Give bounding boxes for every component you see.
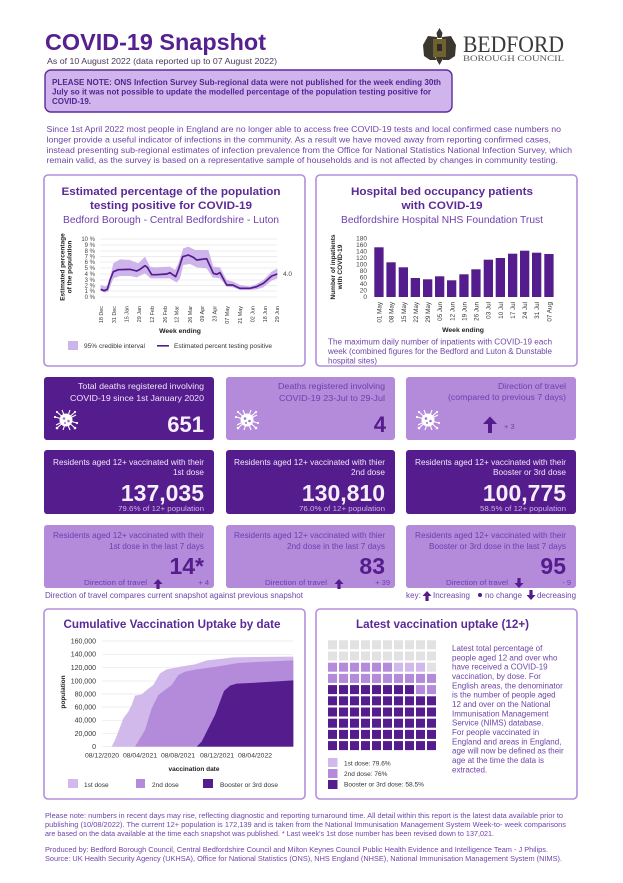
intro text	[46, 124, 572, 165]
tile: first dose total	[44, 450, 214, 514]
heading	[62, 186, 281, 212]
y axis labels: 160	[356, 242, 367, 249]
y axis labels: 1 %	[85, 289, 96, 295]
tile: direction of travel: Direction of travel	[498, 381, 566, 391]
x axis labels: 26 Feb	[163, 306, 169, 323]
y axis labels: 140,000	[71, 652, 96, 659]
y axis labels	[71, 638, 96, 751]
panel: hospital occupancy	[316, 175, 577, 366]
explanatory text: have received a COVID-19	[452, 663, 548, 672]
key: key:	[406, 591, 421, 600]
y axis labels: 7 %	[85, 254, 96, 260]
explanatory text: 12 and over on the National	[452, 700, 551, 709]
logo: Bedford Borough Council	[423, 28, 564, 65]
x axis title: Week ending	[159, 328, 201, 335]
tile: recent deaths	[226, 377, 395, 440]
tile: booster 7 days: - 9	[562, 578, 571, 587]
explanatory text: is the number of people aged	[452, 691, 556, 700]
explanatory text: England and areas in England,	[452, 737, 561, 746]
tile: second dose total: Residents aged 12+ vaccinated with thier	[234, 457, 385, 467]
y axis labels: 4 %	[85, 272, 96, 278]
x axis labels: 02 Jun	[250, 306, 256, 322]
line chart	[60, 233, 292, 335]
tile: booster total: Residents aged 12+ vaccinated with their	[415, 457, 566, 467]
heading: with COVID-19	[400, 200, 482, 212]
tile: total deaths: COVID-19 since 1st January 2020	[70, 393, 204, 403]
y axis labels: 140	[356, 248, 367, 256]
x axis title: vaccination date	[169, 766, 220, 773]
y axis labels: 120,000	[71, 665, 96, 672]
area chart	[60, 638, 293, 773]
tile: recent deaths: COVID-19 23-Jul to 29-Jul	[279, 393, 385, 403]
x axis labels: 08 May	[389, 301, 396, 323]
y axis labels: 160,000	[71, 638, 96, 645]
chart note	[327, 338, 553, 366]
source credits: Source: UK Health Security Agency (UKHSA), Office for National Statistics (ONS), NHS England (NHSE), National Immunisation Management System (NIMS).	[45, 856, 562, 863]
x axis labels: 29 Jun	[275, 306, 281, 322]
y axis labels	[81, 237, 96, 301]
x axis labels: 18 Jun	[263, 306, 269, 322]
intro text: Since 1st April 2022 most people in England are no longer able to access free COVID-19 tests and local confirmed case numbers no	[46, 124, 561, 134]
x axis labels: 08/12/2020	[85, 752, 119, 760]
tile: first dose 7 days: Direction of travel	[84, 578, 147, 587]
tile: first dose total: Residents aged 12+ vaccinated with their	[53, 457, 204, 467]
icon: virus	[54, 410, 78, 430]
x axis labels: 29 May	[425, 301, 432, 323]
x axis labels: 09 Apr	[200, 306, 206, 322]
tile: total deaths	[44, 377, 214, 440]
subheading: Bedford Borough - Central Bedfordshire - Luton	[63, 215, 279, 226]
y axis title	[330, 234, 344, 300]
tile: booster 7 days: Residents aged 12+ vaccinated with their	[415, 530, 566, 540]
callout: please note	[45, 70, 452, 112]
y axis labels: 80,000	[75, 691, 96, 698]
legend	[68, 779, 278, 789]
y axis labels: 5 %	[85, 266, 96, 272]
tile: total deaths: Total deaths registered involving	[78, 381, 204, 391]
tile: second dose 7 days: + 39	[375, 578, 390, 587]
tile: second dose 7 days: Residents aged 12+ vaccinated with thier	[234, 530, 385, 540]
x axis labels	[99, 306, 281, 324]
tile: first dose total: 79.6% of 12+ population	[118, 504, 204, 513]
x axis labels: 22 May	[413, 301, 420, 323]
x axis labels	[376, 301, 553, 323]
x axis labels: 26 Jun	[474, 302, 480, 321]
x axis labels: 18 Dec	[99, 306, 105, 323]
footnote: publishing (10/08/2022). The current 12+ population is 172,139 and is taken from the National Immunisation Management System Week-to- week comparisons	[45, 822, 567, 829]
tile: booster 7 days: 95	[540, 553, 566, 579]
y axis labels: 0 %	[85, 295, 96, 301]
arrow up	[483, 416, 497, 433]
footnote	[45, 813, 567, 838]
footnote: are based on the data available at the time each snapshot was published. * Last week's 1st dose number has been revised down to 137,021.	[45, 831, 494, 838]
key	[406, 590, 576, 601]
x axis labels: 07 May	[225, 306, 231, 324]
tile: second dose 7 days	[226, 525, 395, 589]
legend	[68, 341, 273, 350]
panel: infection estimate	[44, 175, 305, 366]
tile: second dose 7 days: Direction of travel	[265, 578, 327, 587]
x axis labels	[85, 752, 272, 760]
tile: booster total: 100,775	[483, 480, 566, 506]
bars	[374, 247, 554, 297]
x axis labels: 12 Mar	[174, 306, 180, 323]
arrow up	[154, 579, 162, 589]
legend: 2nd dose	[152, 782, 179, 789]
tile: first dose total: 137,035	[121, 480, 204, 506]
x axis labels: 12 Feb	[150, 306, 156, 323]
tile: second dose total: 76.0% of 12+ population	[299, 504, 385, 513]
tile: first dose 7 days: 14*	[169, 553, 204, 579]
icon: crest	[423, 28, 456, 65]
x axis labels: 19 Jun	[462, 302, 468, 321]
report date: As of 10 August 2022 (data reported up to 07 August 2022)	[47, 56, 277, 66]
callout: please note: COVID-19.	[52, 97, 91, 106]
y axis labels	[356, 236, 367, 301]
tile: second dose 7 days: 83	[359, 553, 385, 579]
intro text: remain valid, as the survey is based on a representative sample of households and is not affected by changes in community testing.	[46, 155, 558, 165]
explanatory text: Immunisation Management	[452, 709, 549, 718]
tile: first dose 7 days	[44, 525, 214, 589]
y axis labels: 80	[360, 268, 367, 275]
explanatory text: Service (NIMS) database.	[452, 719, 544, 728]
tile: recent deaths: Deaths registered involving	[278, 381, 385, 391]
x axis labels: 31 Dec	[112, 306, 118, 323]
waffle chart	[328, 640, 436, 750]
x axis labels: 08/04/2022	[238, 752, 272, 760]
tile: recent deaths: 4	[374, 412, 387, 437]
arrow up	[422, 591, 432, 601]
x axis labels: 23 Apr	[212, 306, 218, 322]
tile: direction of travel: (compared to previous 7 days)	[448, 392, 566, 402]
panel: latest uptake	[316, 609, 577, 799]
x axis labels: 15 Jan	[124, 306, 130, 322]
waffle legend	[328, 758, 424, 789]
explanatory text: people aged 12 and over who	[452, 653, 558, 662]
tile: booster 7 days: Booster or 3rd dose in the last 7 days	[429, 541, 566, 551]
y axis title	[60, 233, 74, 301]
x axis labels: 24 Jul	[522, 302, 529, 319]
tile: second dose 7 days: 2nd dose in the last 7 days	[287, 541, 385, 551]
tile: second dose total: 2nd dose	[351, 467, 385, 477]
y axis title: Estimated percentage	[60, 233, 66, 301]
x axis labels: 05 Jun	[437, 302, 444, 321]
tile: first dose 7 days: 1st dose in the last 7 days	[109, 541, 204, 551]
estimate line	[101, 255, 277, 291]
arrow down	[514, 578, 524, 588]
y axis title: of the population	[66, 241, 74, 293]
first dose cells	[394, 663, 425, 672]
logo wordmark: BEDFORD	[463, 32, 564, 57]
y axis labels: 0	[363, 294, 367, 301]
tile: total deaths: 651	[167, 412, 204, 437]
subheading: Bedfordshire Hospital NHS Foundation Trust	[341, 215, 543, 226]
unvaccinated rows	[328, 640, 436, 672]
booster cells	[328, 685, 436, 750]
x axis labels: 08/12/2021	[200, 752, 234, 760]
x axis labels: 21 May	[238, 306, 244, 324]
explanatory text: vaccination, by dose. For	[452, 672, 541, 681]
y axis labels: 6 %	[85, 260, 96, 266]
y axis title: with COVID-19	[337, 244, 344, 290]
y axis labels: 40,000	[75, 718, 96, 725]
direction note: Direction of travel compares current snapshot against previous snapshot	[45, 591, 304, 600]
tile: booster total	[406, 450, 576, 514]
end value label: 4.0	[283, 271, 292, 278]
y axis labels: 10 %	[81, 237, 96, 243]
y axis labels: 100	[356, 262, 367, 268]
heading: Latest vaccination uptake (12+)	[356, 619, 529, 631]
intro text: longer provide a useful indicator of infections in the community. As a result we have moved away from reporting confirmed cases,	[46, 134, 551, 144]
explanatory text: Latest total percentage of	[452, 644, 543, 653]
legend: 1st dose	[84, 782, 109, 789]
panel: cumulative uptake	[44, 609, 305, 799]
chart note: hospital sites)	[328, 356, 377, 366]
x axis labels: 17 Jul	[510, 302, 517, 319]
bar chart	[330, 234, 554, 334]
callout: please note: July so it was not possible to update the modelled percentage of the population testing positive for	[52, 88, 431, 96]
chart note: week (combined figures for the Bedford and Luton & Dunstable	[327, 347, 553, 356]
tile: first dose total: 1st dose	[173, 467, 204, 477]
explanatory text	[452, 644, 564, 774]
key: no change	[485, 591, 523, 600]
tile: direction of travel: + 3	[504, 422, 515, 431]
heading: Cumulative Vaccination Uptake by date	[64, 619, 280, 631]
tile: booster 7 days: Direction of travel	[446, 578, 508, 587]
y axis labels: 20	[360, 288, 367, 294]
y axis labels: 8 %	[85, 249, 96, 255]
tile: direction of travel	[406, 377, 576, 440]
credible interval band	[101, 247, 277, 293]
arrow up	[334, 579, 344, 589]
tile: second dose total	[226, 450, 395, 514]
tile: booster total: 58.5% of 12+ population	[480, 504, 566, 513]
explanatory text: age at the time the data is	[452, 756, 544, 765]
x axis labels: 03 Jul	[486, 302, 493, 319]
y axis title: population	[60, 675, 67, 709]
y axis labels: 3 %	[85, 278, 96, 284]
x axis labels: 08/08/2021	[161, 752, 195, 760]
key: Increasing	[433, 591, 470, 600]
explanatory text: age will now be defined as their	[452, 747, 564, 756]
second dose cells	[328, 663, 436, 694]
waffle legend: 1st dose: 79.6%	[344, 760, 391, 768]
x axis labels: 31 Jul	[534, 302, 541, 319]
chart note: The maximum daily number of inpatients with COVID-19 each	[328, 338, 552, 346]
x axis labels: 12 Jun	[449, 302, 456, 321]
source credits: Produced by: Bedford Borough Council, Central Bedfordshire Council and Milton Keynes Council Public Health Evidence and Intelligence Team - J Philips.	[45, 847, 548, 854]
y axis labels: 2 %	[85, 284, 96, 290]
heading: testing positive for COVID-19	[90, 200, 252, 212]
y axis labels: 60	[360, 274, 367, 282]
explanatory text: English areas, the denominator	[452, 681, 563, 690]
tile: first dose 7 days: Residents aged 12+ vaccinated with their	[53, 530, 204, 540]
heading: Hospital bed occupancy patients	[351, 186, 533, 198]
tile: booster total: Booster or 3rd dose	[493, 467, 566, 477]
explanatory text: For people vaccinated in	[452, 728, 539, 737]
waffle legend: 2nd dose: 76%	[344, 771, 388, 778]
callout: please note: PLEASE NOTE: ONS Infection Survey Sub-regional data were not published for the week ending 30th	[52, 78, 441, 87]
icon: virus	[235, 410, 259, 430]
x axis labels: 10 Jul	[498, 302, 505, 319]
icon: virus	[416, 410, 440, 430]
y axis labels: 0	[92, 744, 96, 751]
y axis labels: 9 %	[85, 243, 96, 249]
intro text: instead presenting sub-regional estimates of infection prevalence from the Office for National Statistics National Infection Survey, which	[46, 145, 572, 155]
first dose area	[112, 657, 293, 747]
y axis labels: 100,000	[71, 678, 96, 685]
y axis title: Number of inpatients	[330, 234, 337, 300]
footnote: Please note: numbers in recent days may rise, reflecting diagnostic and reporting turnaround time. All detail within this report is the latest data available prior to	[45, 813, 563, 820]
legend: Booster or 3rd dose	[220, 782, 278, 789]
arrow down	[526, 590, 536, 600]
logo subline: BOROUGH COUNCIL	[463, 53, 564, 63]
x axis labels: 15 May	[401, 301, 408, 323]
heading: Estimated percentage of the population	[62, 186, 281, 198]
x axis labels: 08/04/2021	[123, 752, 157, 760]
x axis labels: 01 May	[376, 301, 384, 323]
key: decreasing	[537, 591, 576, 600]
tile: first dose 7 days: + 4	[198, 578, 209, 587]
y axis labels: 120	[356, 255, 367, 262]
title: COVID-19 Snapshot	[45, 29, 266, 55]
y axis labels: 40	[360, 281, 367, 288]
x axis labels: 29 Jan	[137, 306, 143, 322]
legend: Estimated percent testing positive	[174, 343, 273, 350]
legend: 95% credible interval	[84, 343, 145, 350]
y axis labels: 60,000	[75, 704, 96, 711]
x axis labels: 26 Mar	[188, 306, 194, 323]
x axis title: Week ending	[442, 327, 484, 334]
waffle legend: Booster or 3rd dose: 58.5%	[344, 782, 424, 788]
explanatory text: extracted.	[452, 765, 487, 774]
y axis labels: 20,000	[75, 731, 96, 738]
tile: second dose total: 130,810	[302, 480, 385, 506]
tile: booster 7 days	[406, 525, 576, 588]
x axis labels: 07 Aug	[546, 302, 553, 322]
second dose area	[135, 660, 293, 747]
source credits	[45, 847, 562, 863]
heading	[351, 186, 533, 212]
booster area	[197, 680, 293, 747]
y axis labels: 180	[356, 236, 367, 242]
